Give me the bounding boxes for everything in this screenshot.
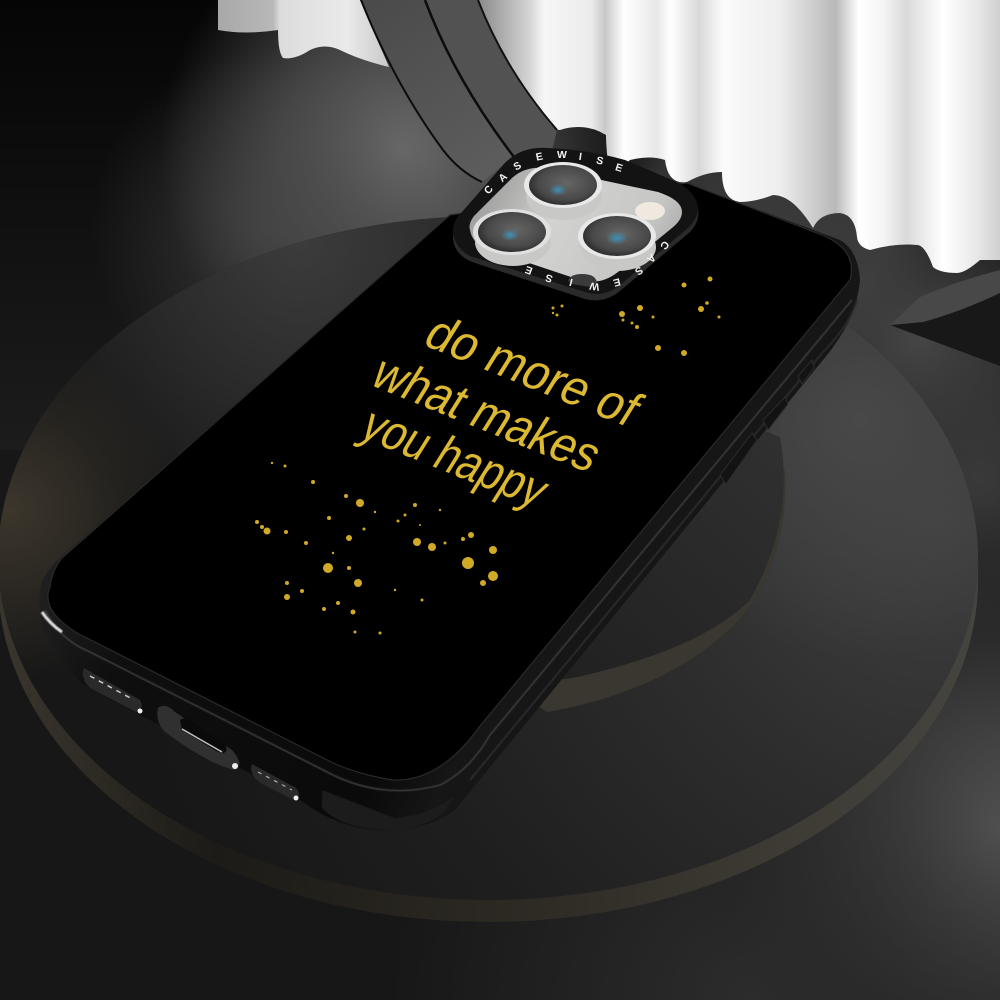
camera: right lens: [578, 213, 656, 271]
camera: flash: [635, 202, 665, 220]
brand text: CASEWISE bottom: [524, 238, 671, 293]
slogan: line 2: what makes: [361, 345, 612, 482]
camera: top lens: [524, 162, 602, 220]
phone: body walls: [40, 183, 860, 830]
phone: corner wall sheen: [322, 790, 455, 830]
brand text: CASEWISE bottom: S: [632, 264, 645, 277]
brand text: CASEWISE top: A: [496, 170, 510, 185]
phone: right side buttons: [720, 360, 814, 484]
camera: glass plate: [470, 168, 682, 282]
camera: left lens: [473, 209, 551, 266]
brand text: CASEWISE top: E: [535, 150, 544, 164]
phone: corner highlight: [42, 612, 62, 632]
brand text: CASEWISE top: W: [557, 149, 567, 161]
port: left speaker: [83, 668, 142, 714]
brand text: CASEWISE top: S: [595, 154, 605, 168]
phone: [40, 183, 860, 830]
slogan: line 1: do more of: [415, 305, 651, 437]
brand text: CASEWISE top: I: [578, 151, 583, 163]
brand text: CASEWISE bottom: A: [644, 251, 658, 265]
slogan text: [351, 305, 651, 517]
brand text: CASEWISE bottom: C: [657, 238, 671, 252]
camera: bump side: [453, 160, 698, 300]
arch: dark curved bands: [361, 0, 557, 182]
gold splatter: lower: [255, 462, 498, 634]
slogan: line 3: you happy: [351, 397, 560, 517]
disk: surface lighting: [0, 218, 948, 642]
camera: black frame: [453, 148, 698, 294]
brand text: CASEWISE bottom: I: [568, 276, 574, 288]
brand text: CASEWISE top: S: [511, 159, 524, 173]
brand text: CASEWISE bottom: E: [612, 275, 622, 289]
phone: front glass: [48, 183, 851, 780]
port: right speaker: [251, 764, 299, 801]
brand text: CASEWISE top: E: [614, 161, 624, 175]
phone: right wall sheen: [470, 300, 857, 780]
brand text: CASEWISE bottom: S: [544, 271, 554, 285]
brand text: CASEWISE bottom: E: [524, 263, 534, 277]
brand text: CASEWISE bottom: W: [589, 279, 600, 293]
brand text: CASEWISE top: [482, 149, 624, 197]
inner raised platform: [480, 380, 785, 712]
camera: lidar: [568, 274, 597, 287]
disk: large round platform: [0, 217, 978, 922]
curtain: top right: [470, 0, 1000, 273]
brand text: CASEWISE top: C: [482, 183, 496, 197]
port: charging: [157, 706, 239, 770]
camera module: [453, 148, 698, 300]
arch foot: right side: [890, 270, 1000, 366]
curtain: top left: [218, 0, 389, 67]
phone: bezel rim: [45, 300, 852, 791]
gold splatter: upper: [552, 276, 720, 356]
